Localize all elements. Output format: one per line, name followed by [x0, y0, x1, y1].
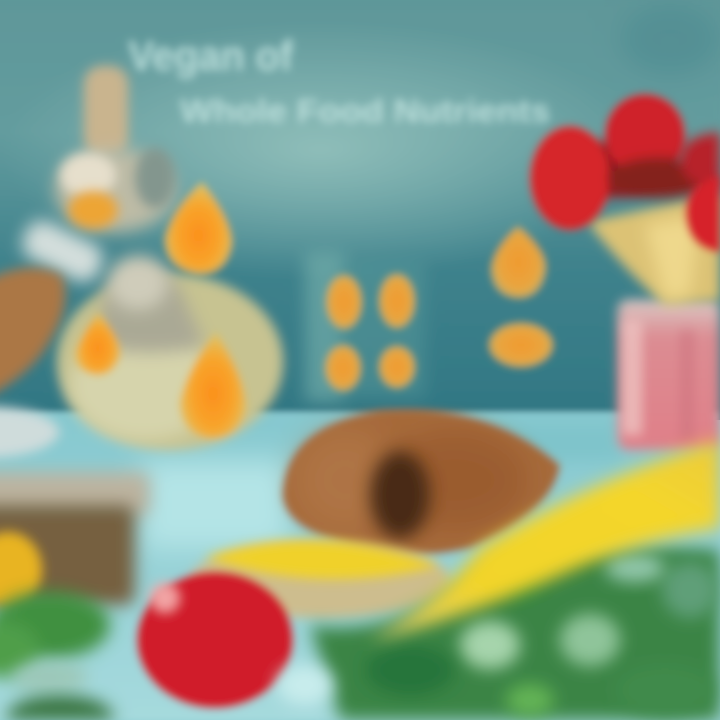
large banana [368, 440, 720, 642]
left greens [0, 591, 115, 720]
jar [618, 300, 720, 450]
pale highlight at bottom of table [277, 665, 333, 705]
left glasses and plate [0, 406, 150, 608]
heading: Vegan of [128, 32, 294, 79]
hand [0, 268, 65, 405]
large droplet [165, 182, 232, 274]
drop in bowl, left [75, 312, 120, 375]
mixing bowl [57, 256, 283, 450]
icon: droplet right [491, 226, 546, 298]
right greens [310, 547, 720, 720]
red apple [137, 572, 293, 708]
bread loaf [282, 409, 560, 555]
background wall [0, 0, 720, 440]
plate with banana [190, 540, 450, 618]
icon: oval right [489, 323, 553, 367]
heading [128, 32, 550, 129]
table surface [0, 412, 720, 720]
pasta cone [588, 194, 720, 305]
sleeve [17, 215, 108, 287]
hand and spoon illustration [0, 66, 175, 405]
heading: Whole Food Nutrients [180, 93, 550, 129]
chart: centre column pairs [305, 252, 425, 402]
drop in bowl, right [180, 332, 246, 438]
upper bowl [55, 148, 175, 232]
spoon handle [84, 66, 128, 156]
orange drop in bowl [68, 191, 118, 229]
tomatoes [550, 142, 670, 198]
jar with tomatoes and pasta [530, 94, 720, 450]
